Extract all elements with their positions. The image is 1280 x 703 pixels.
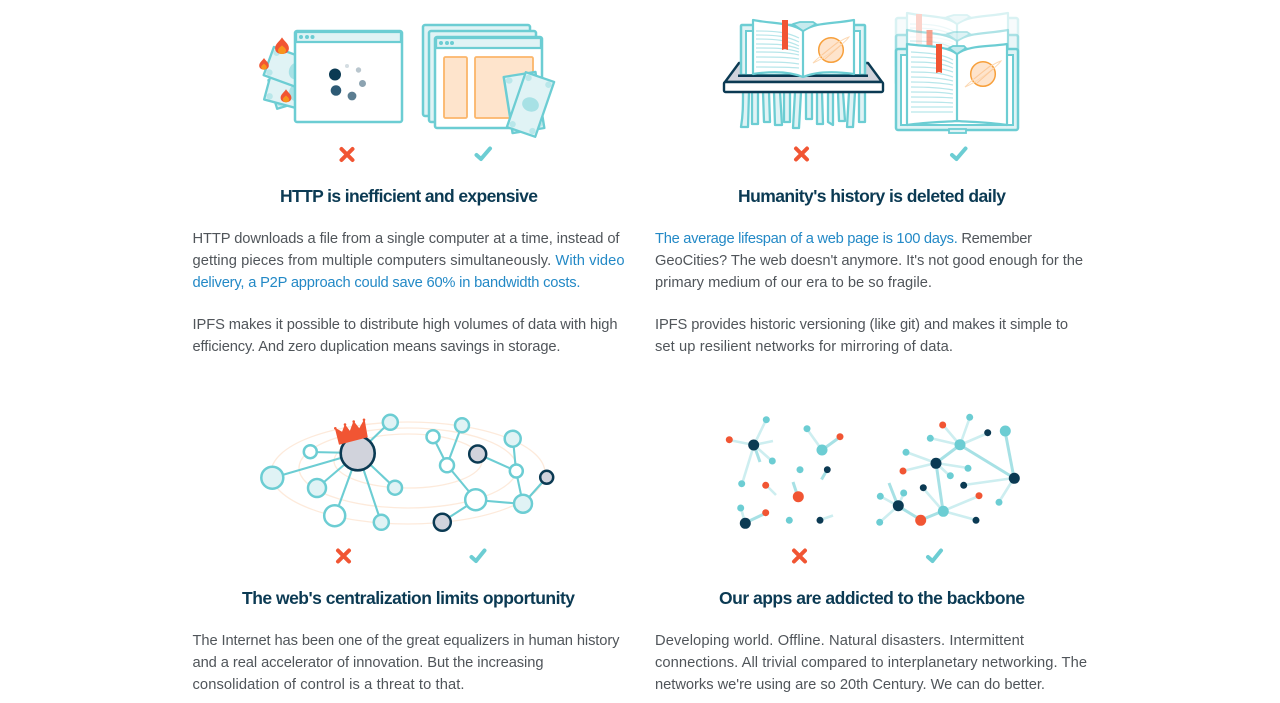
body text: The Internet has been one of the great equalizers in human history bbox=[192, 633, 620, 649]
chart: connected mesh bbox=[876, 414, 1020, 526]
heading: Our apps are addicted to the backbone bbox=[719, 588, 1025, 608]
panel: Humanity's history is deleted daily bbox=[655, 13, 1083, 355]
body text: Developing world. Offline. Natural disasters. Intermittent bbox=[655, 633, 1024, 649]
icon: red cross bbox=[342, 149, 352, 160]
chart: centralized vs distributed network bbox=[261, 415, 553, 531]
icon: bills on fire bbox=[259, 37, 333, 114]
body text: connections. All trivial compared to interplanetary networking. The bbox=[655, 655, 1087, 671]
icon: book in shredder bbox=[724, 20, 883, 128]
body text bbox=[192, 633, 620, 693]
body text: The average lifespan of a web page is 100 days. Remember bbox=[655, 231, 1032, 247]
heading: The web's centralization limits opportunity bbox=[242, 588, 575, 608]
body text: networks we're using are so 20th Century. We can do better. bbox=[655, 677, 1045, 693]
body text: consolidation of control is a threat to that. bbox=[192, 677, 464, 693]
body text: efficiency. And zero duplication means savings in storage. bbox=[192, 339, 560, 355]
shredded strips bbox=[741, 92, 865, 128]
panel: HTTP is inefficient and expensive bbox=[192, 25, 624, 355]
icon: red cross bbox=[796, 148, 807, 160]
body text: and a real accelerator of innovation. But the increasing bbox=[192, 655, 544, 671]
body text: IPFS provides historic versioning (like git) and makes it simple to bbox=[655, 317, 1068, 333]
shredder body bbox=[724, 82, 883, 92]
icon: crown bbox=[334, 418, 367, 444]
heading: HTTP is inefficient and expensive bbox=[280, 186, 538, 206]
icon: teal check bbox=[952, 148, 966, 159]
chart: disconnected nodes bbox=[726, 416, 844, 529]
icon: teal check bbox=[476, 148, 490, 159]
body text: GeoCities? The web doesn't anymore. It's not good enough for the bbox=[655, 253, 1083, 269]
icon: teal check bbox=[472, 550, 484, 561]
body text: primary medium of our era to be so fragile. bbox=[655, 275, 932, 291]
panel: Our apps are addicted to the backbone bbox=[655, 414, 1087, 693]
body text: IPFS makes it possible to distribute high volumes of data with high bbox=[192, 317, 618, 333]
panel: The web's centralization limits opportunity bbox=[192, 415, 620, 693]
body text bbox=[655, 231, 1083, 355]
icon: red cross bbox=[338, 550, 349, 562]
body text bbox=[192, 231, 624, 355]
central hub node bbox=[341, 436, 375, 470]
body text bbox=[655, 633, 1087, 693]
bookmark bbox=[782, 20, 788, 50]
icon: burning money behind slow browser bbox=[259, 31, 402, 122]
icon: red cross bbox=[794, 550, 805, 562]
body text: delivery, a P2P approach could save 60% in bandwidth costs. bbox=[192, 275, 580, 291]
icon: teal check bbox=[928, 550, 941, 561]
icon: backed up book with versions bbox=[896, 13, 1018, 133]
icon: loading browser window bbox=[295, 31, 402, 122]
heading: Humanity's history is deleted daily bbox=[738, 186, 1006, 206]
body text: getting pieces from multiple computers simultaneously. With video bbox=[192, 253, 624, 269]
shredder tray bbox=[725, 63, 882, 82]
body text: set up resilient networks for mirroring of data. bbox=[655, 339, 953, 355]
body text: HTTP downloads a file from a single computer at a time, instead of bbox=[192, 231, 620, 247]
icon: stacked browsers with money bbox=[423, 25, 554, 137]
